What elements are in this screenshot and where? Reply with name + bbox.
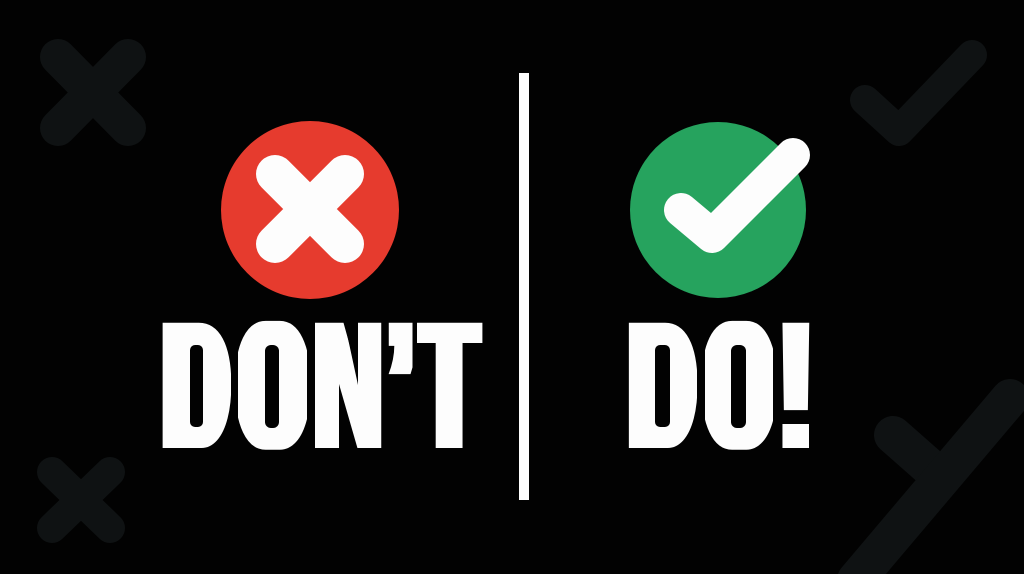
divider bbox=[519, 73, 529, 500]
panel: do bbox=[630, 122, 811, 487]
background icon: faint check top right bbox=[865, 55, 972, 131]
icon: green circle with white check bbox=[630, 122, 806, 298]
background icon: faint check bottom right bbox=[856, 398, 1010, 574]
heading: DON'T: DON’T bbox=[164, 284, 476, 487]
background icon: faint cross top left bbox=[58, 57, 128, 128]
panel: don't bbox=[164, 121, 476, 487]
background icon: faint cross bottom left bbox=[52, 472, 110, 528]
icon: red circle with white cross bbox=[221, 121, 399, 299]
heading: DO!: DO! bbox=[630, 284, 811, 487]
